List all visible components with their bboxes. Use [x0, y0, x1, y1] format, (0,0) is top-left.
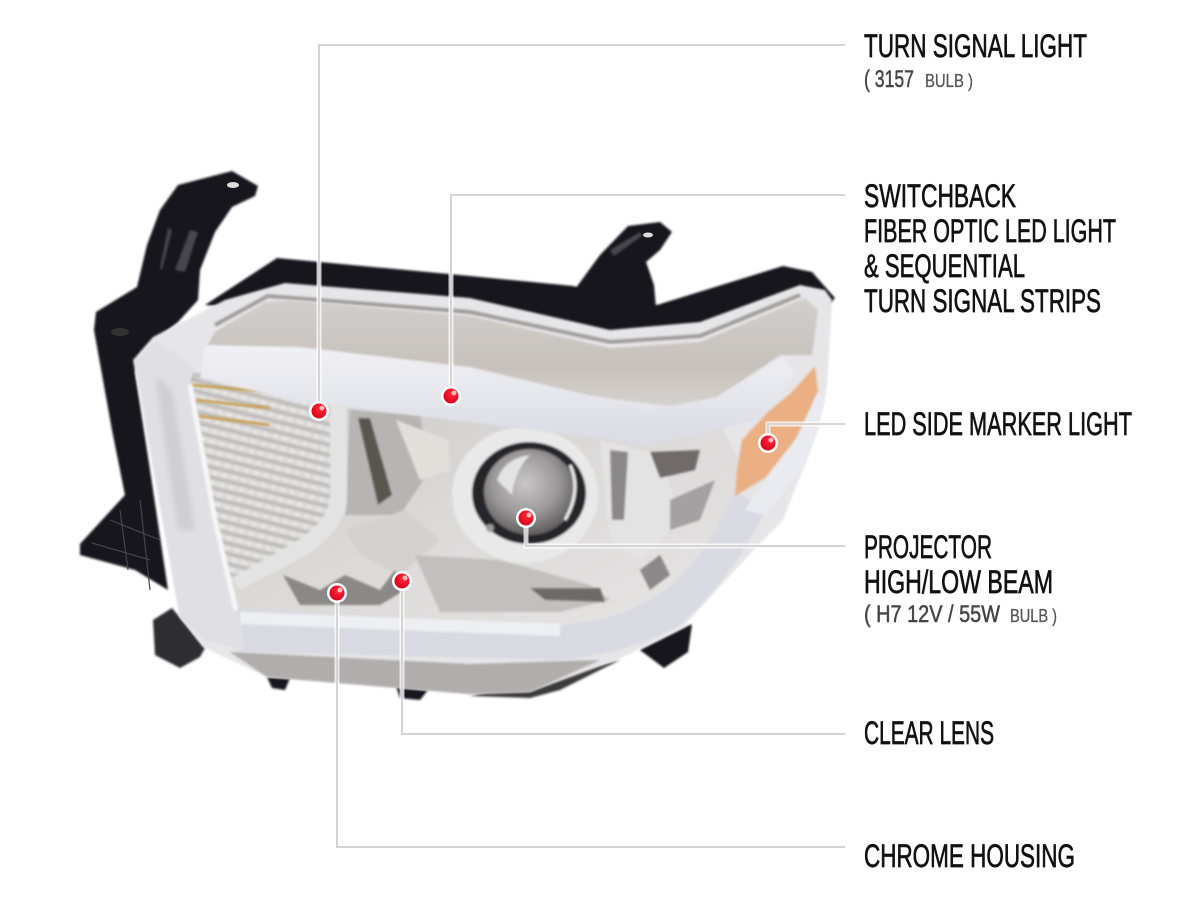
chrome rim lines [215, 295, 800, 342]
label: turn signal light: BULB ) [925, 71, 973, 91]
label: switchback [864, 178, 1116, 319]
label: projector: HIGH/LOW BEAM [864, 564, 1053, 600]
label: turn signal light [864, 28, 1087, 93]
dot: clear lens [392, 571, 412, 591]
projector outer ring [452, 427, 598, 563]
upper chrome band [205, 298, 818, 410]
label: switchback: & SEQUENTIAL [864, 248, 1025, 284]
label: chrome housing: CHROME HOUSING [864, 838, 1075, 874]
dot: switchback [441, 386, 461, 406]
dot: turn signal [309, 401, 329, 421]
label: projector: BULB ) [1010, 606, 1057, 626]
label: switchback: TURN SIGNAL STRIPS [864, 283, 1101, 319]
reflector shading [283, 410, 715, 612]
callout marker dots [309, 386, 778, 603]
inner chrome reflector [190, 372, 745, 625]
projector dark bezel [472, 442, 586, 544]
label: switchback: SWITCHBACK [864, 178, 1016, 214]
label: clear lens: CLEAR LENS [864, 715, 994, 751]
label: projector: PROJECTOR [864, 529, 992, 565]
headlight assembly [80, 171, 835, 700]
dot: chrome housing [327, 583, 347, 603]
rear black brackets and housing [80, 171, 835, 700]
bracket highlights [160, 228, 642, 272]
projector glass [484, 449, 576, 535]
amber side marker [735, 366, 818, 496]
callout leader lines [319, 45, 845, 847]
left clear turn signal [190, 378, 335, 585]
label: projector [864, 529, 1057, 628]
clear light tube [200, 345, 795, 660]
lens body [133, 283, 832, 694]
projector [452, 427, 598, 563]
bracket grid [92, 500, 160, 590]
dot: projector [516, 508, 536, 528]
right lens edge [745, 392, 825, 515]
label: projector: ( H7 12V / 55W [864, 601, 1000, 628]
label: turn signal light: ( 3157 [864, 66, 914, 93]
label: turn signal light: TURN SIGNAL LIGHT [864, 28, 1087, 64]
lower lens lip [230, 652, 600, 694]
dot: side marker [758, 433, 778, 453]
left lens edge band [136, 340, 245, 650]
